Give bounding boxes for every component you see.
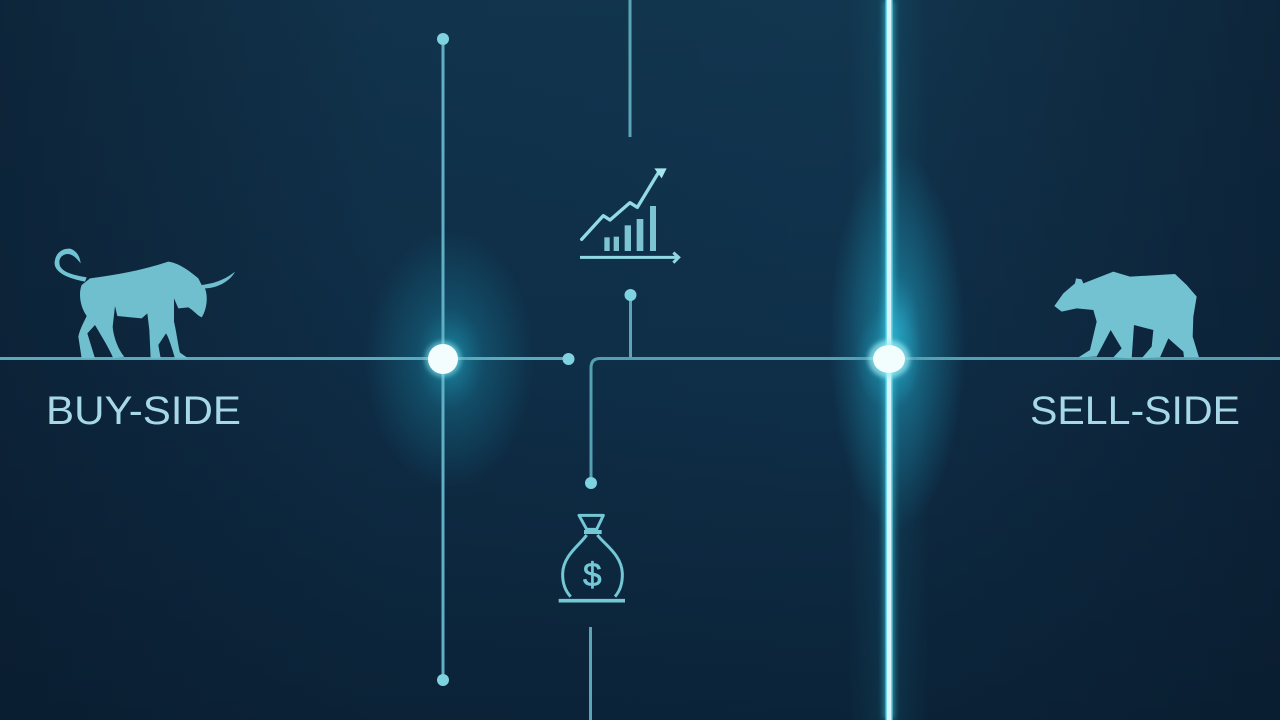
vertical connector: top center line — [628, 0, 632, 137]
horizontal axis: left segment — [0, 357, 568, 360]
vertical connector: bottom center line — [589, 627, 592, 720]
glow: left node — [365, 229, 535, 489]
bag knot — [584, 526, 602, 538]
node: right junction — [868, 340, 910, 378]
icon: bull — [55, 249, 235, 358]
icon: growth chart — [580, 168, 679, 263]
label: buy-side: BUY-SIDE — [46, 389, 241, 433]
icon: bear — [1054, 272, 1199, 358]
dollar sign: $ — [583, 557, 602, 594]
trend line — [582, 172, 659, 239]
vertical connector: left line — [442, 39, 444, 680]
bag body — [563, 535, 622, 597]
vertical connector: stub to dot — [629, 295, 632, 358]
endpoint dots — [437, 33, 636, 686]
node: left junction — [425, 341, 461, 377]
bars — [604, 206, 656, 251]
trend arrowhead — [654, 168, 667, 178]
horizontal axis: right branch with elbow — [591, 358, 1280, 483]
bag top — [579, 515, 603, 529]
icon: money bag — [559, 515, 625, 601]
bright vertical beam — [884, 0, 894, 720]
axis arrow — [580, 253, 679, 263]
label: sell-side: SELL-SIDE — [1030, 389, 1240, 433]
glow: right beam — [829, 0, 965, 720]
bag base — [559, 595, 625, 606]
